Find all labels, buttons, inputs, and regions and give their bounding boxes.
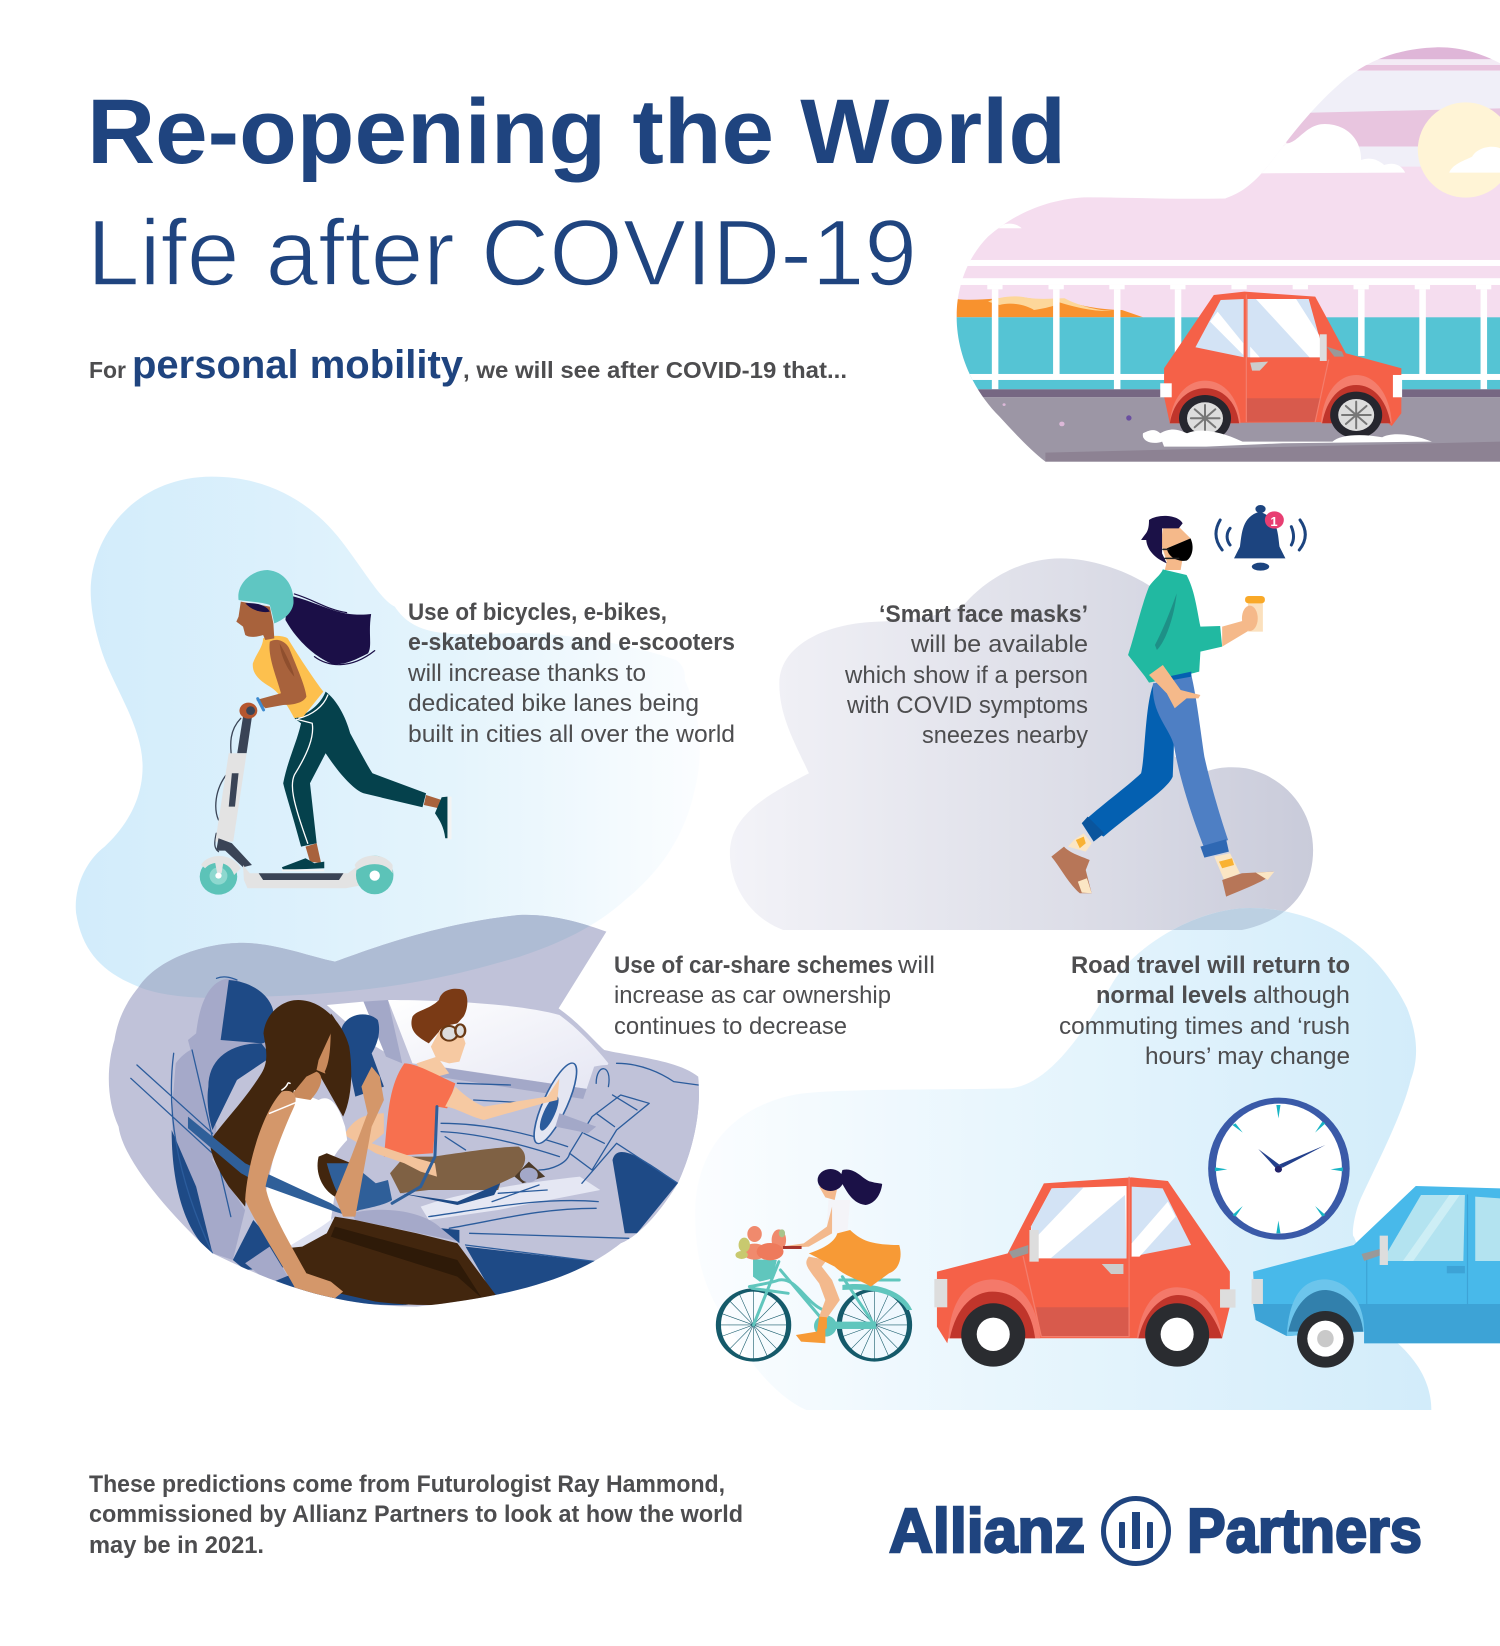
text: car-share schemes: will: [897, 952, 935, 979]
blue car: [1252, 1186, 1500, 1368]
text: bicycles and e-scooters: dedicated bike lanes being: [408, 690, 699, 717]
driver seat headrest: [341, 1014, 384, 1097]
text: bicycles and e-scooters: [407, 599, 735, 748]
footer source note: These predictions come from Futurologist Ray Hammond,: [89, 1471, 725, 1498]
text: road travel: normal levels: [1096, 982, 1247, 1009]
red car: [1160, 292, 1402, 442]
intro line: For: [89, 357, 126, 383]
driver: [345, 989, 559, 1203]
rider hair strands: [294, 594, 375, 665]
intro line: , we will see after COVID-19 that...: [463, 357, 847, 383]
bicycle: [718, 1262, 912, 1360]
railing posts: [970, 285, 1500, 390]
title: Re-opening the World: Re-opening the World: [87, 81, 1066, 183]
sky bands: [970, 47, 1500, 261]
intro line: [89, 343, 847, 387]
distant orange hills: [957, 296, 1143, 317]
panel: car-share interior illustration: [108, 914, 699, 1307]
cyclist: [783, 1169, 901, 1343]
sun: [1418, 102, 1500, 198]
rider yellow top: [253, 636, 323, 718]
background blob: grey, smart mask panel: [730, 558, 1313, 930]
background blob: light blue, scooter panel: [76, 477, 700, 998]
logo: Allianz Partners: [889, 1497, 1422, 1566]
passenger top: [266, 1090, 392, 1248]
rider arm: [239, 640, 306, 719]
scooter: [200, 717, 393, 895]
text: road travel: Road travel will return to: [1071, 952, 1350, 979]
passenger arms: [245, 1067, 384, 1298]
dashboard: [417, 1063, 710, 1303]
passenger face: [293, 1014, 336, 1100]
text: bicycles and e-scooters: e-skateboards and e-scooters: [408, 629, 735, 656]
text: car-share schemes: increase as car ownership: [614, 982, 891, 1009]
footer source note: [89, 1471, 743, 1559]
footer source note: commissioned by Allianz Partners to look at how the world: [89, 1501, 743, 1528]
text: road travel: [1059, 952, 1350, 1070]
text: smart face masks: ‘Smart face masks’: [879, 601, 1088, 628]
logo: Allianz Partners: Partners: [1187, 1497, 1422, 1566]
text: bicycles and e-scooters: Use of bicycles, e-bikes,: [408, 599, 667, 626]
passenger hair back: [210, 1000, 351, 1207]
text: road travel: although: [1253, 982, 1350, 1009]
text: smart face masks: sneezes nearby: [922, 722, 1088, 749]
intro line: personal mobility: [132, 343, 464, 387]
sea: [900, 317, 1500, 389]
text: car-share schemes: continues to decrease: [614, 1013, 847, 1040]
logo: Allianz Partners: Allianz: [889, 1497, 1085, 1566]
rider trousers: [283, 692, 426, 847]
head with mask: [1141, 516, 1193, 570]
badge number: 1: [1270, 514, 1278, 529]
back leg: [1051, 685, 1175, 893]
windshield and windows: [327, 1000, 608, 1100]
bell notification icon: [1216, 505, 1305, 571]
flower basket: [735, 1226, 786, 1282]
background blob: light blue, road travel panel: [695, 908, 1431, 1410]
steering wheel: [533, 1062, 596, 1144]
text: car-share schemes: Use of car-share schemes: [614, 952, 893, 979]
illustration: man in face mask with coffee: [1051, 505, 1305, 897]
arm in pocket: [1149, 665, 1200, 708]
rider hair: [285, 595, 371, 664]
text: smart face masks: with COVID symptoms: [846, 692, 1088, 719]
text: smart face masks: will be available: [910, 631, 1088, 658]
illustration: traffic with cyclist and clock: [718, 1098, 1500, 1368]
text: bicycles and e-scooters: will increase thanks to: [407, 660, 646, 687]
rider helmet: [238, 570, 294, 623]
road: [978, 389, 1500, 462]
overlap of blue and grey blobs: [1173, 908, 1284, 930]
front leg: [1153, 675, 1274, 897]
passenger trousers: [290, 1217, 498, 1305]
road spray: [1143, 429, 1432, 447]
railing top: [956, 260, 1500, 318]
clock: [1208, 1098, 1350, 1240]
seat belt: [188, 1117, 351, 1217]
rider back leg: [424, 795, 451, 839]
text: car-share schemes: [614, 952, 935, 1040]
subtitle: Life after COVID-19: Life after COVID-19: [87, 200, 917, 305]
overlap with blue blob: [139, 914, 590, 998]
passenger seat: [131, 977, 500, 1305]
illustration: car on seaside road: [956, 47, 1500, 462]
text: bicycles and e-scooters: built in cities all over the world: [408, 721, 735, 748]
red car: [934, 1177, 1236, 1367]
footer source note: may be in 2021.: [89, 1532, 264, 1559]
rider face: [236, 602, 274, 640]
text: smart face masks: [844, 601, 1088, 749]
text: smart face masks: which show if a person: [844, 662, 1088, 689]
coffee cup and hand: [1222, 596, 1265, 647]
text: road travel: commuting times and ‘rush: [1059, 1013, 1350, 1040]
illustration: woman on e-scooter: [200, 570, 451, 895]
rider front foot: [282, 843, 324, 871]
shirt: [1128, 569, 1222, 683]
text: road travel: hours’ may change: [1145, 1043, 1350, 1070]
